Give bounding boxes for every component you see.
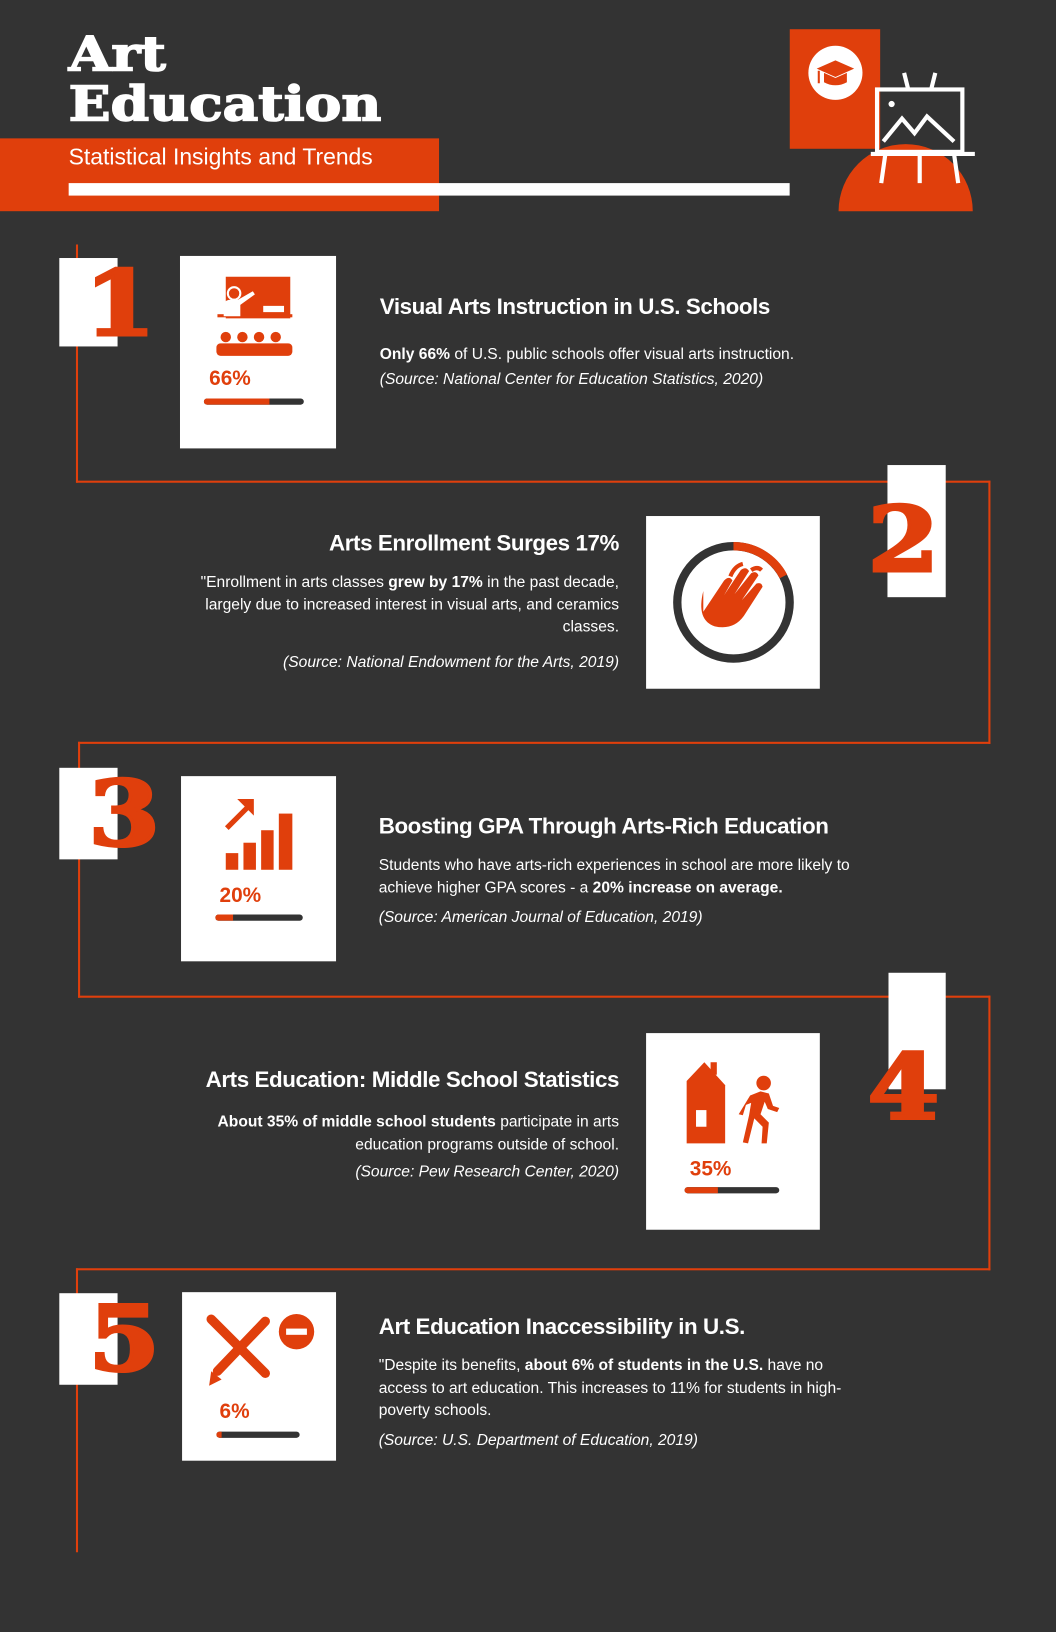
icon card 1: classroom: 66%: [209, 367, 251, 390]
section 1: [59, 252, 794, 448]
icon card 5: pencil and brush: [182, 1292, 336, 1461]
section 5: [59, 1287, 841, 1461]
section 3: [59, 762, 850, 962]
text 1: Only 66% of U.S. public schools offer visual arts instruction.: [380, 345, 794, 363]
text 2: [201, 531, 619, 671]
text 3: Students who have arts-rich experiences in school are more likely to achieve higher GPA scores - a 20% increase on average.: [379, 856, 850, 896]
text 5: "Despite its benefits, about 6% of students in the U.S. have no access to art education. This increases to 11% for students in high-poverty schools.: [379, 1357, 841, 1419]
number 5: 5: [88, 1287, 160, 1392]
text 3: (Source: American Journal of Education, 2019): [379, 908, 703, 926]
icon card 3: growth chart: 20%: [220, 884, 261, 907]
text 5: Art Education Inaccessibility in U.S.: [379, 1314, 745, 1339]
text 4: [206, 1067, 619, 1181]
icon card 3: growth chart: [181, 776, 336, 961]
text 1: (Source: National Center for Education Statistics, 2020): [380, 370, 763, 388]
number 3: 3: [88, 762, 160, 867]
text 1: Visual Arts Instruction in U.S. Schools: [380, 294, 770, 319]
icon card 5: pencil and brush: 6%: [220, 1400, 250, 1423]
text 4: About 35% of middle school students participate in arts education programs outside of school.: [218, 1113, 619, 1153]
header: white bar: [69, 183, 790, 196]
number 4: [868, 972, 946, 1140]
text 3: Boosting GPA Through Arts-Rich Education: [379, 814, 828, 839]
number 4: 4: [868, 1035, 939, 1140]
number 2: 2: [868, 488, 939, 593]
text 4: (Source: Pew Research Center, 2020): [355, 1163, 619, 1181]
icon card 4: school and walking student: [646, 1033, 820, 1230]
text 5: [379, 1314, 841, 1449]
section 2: [201, 465, 946, 689]
icon card 2: clapping hands ring: [646, 516, 820, 689]
text 1: [380, 294, 794, 388]
icon card 1: classroom: [180, 256, 336, 448]
header: title: [67, 26, 381, 132]
text 4: Arts Education: Middle School Statistics: [206, 1067, 619, 1092]
number 1: 1: [84, 252, 156, 357]
header: title: Education: [69, 76, 381, 132]
connector lines: [76, 244, 78, 483]
text 2: (Source: National Endowment for the Arts, 2019): [283, 653, 619, 671]
text 5: (Source: U.S. Department of Education, 2019): [379, 1431, 698, 1449]
text 3: [379, 814, 850, 926]
header: subtitle band: [0, 138, 439, 211]
text 2: Arts Enrollment Surges 17%: [329, 531, 619, 556]
header: subtitle band: Statistical Insights and Trends: [69, 144, 373, 170]
icon card 4: school and walking student: 35%: [690, 1158, 731, 1181]
text 2: "Enrollment in arts classes grew by 17% in the past decade, largely due to increased interest in visual arts, and ceramics classes.: [201, 573, 619, 636]
header icon: graduation and easel: [790, 29, 975, 212]
header: title: Art: [69, 26, 166, 82]
section 4: [206, 972, 946, 1230]
